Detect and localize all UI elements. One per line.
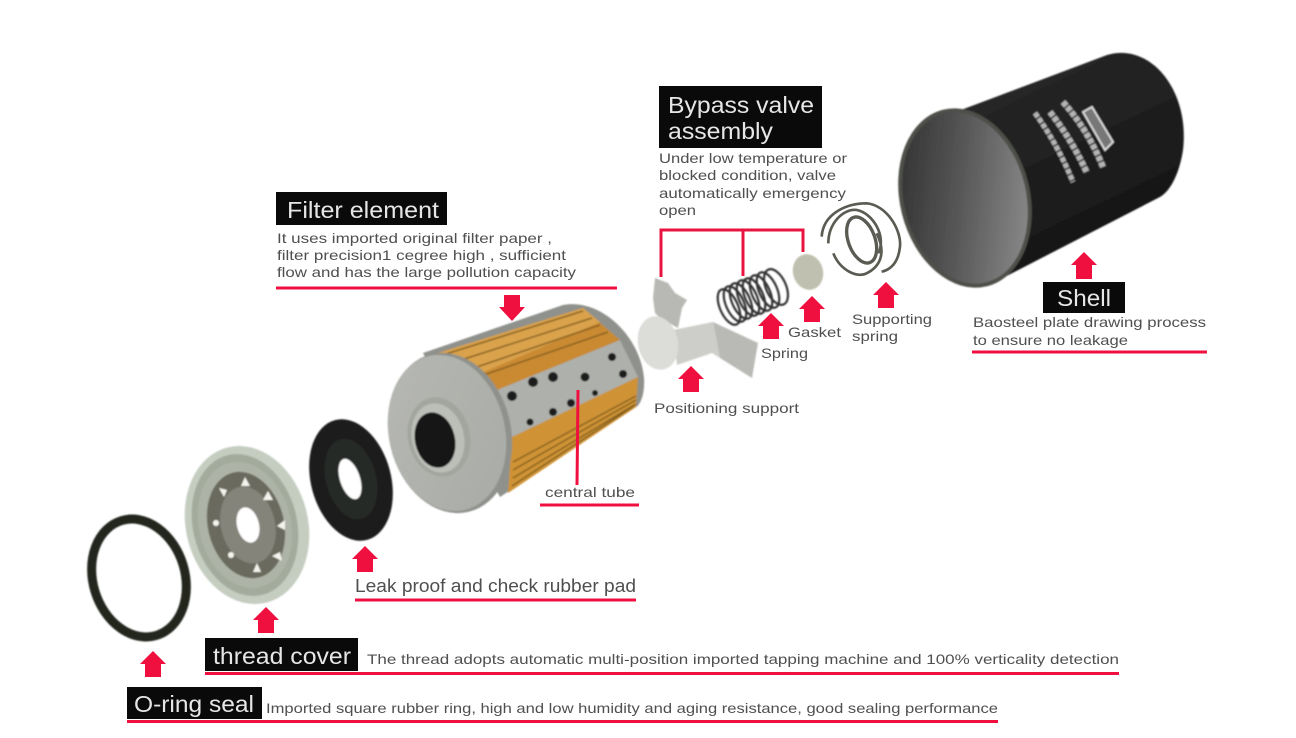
text: central tube: central tube: [545, 484, 635, 500]
underline: rubber pad: [355, 598, 636, 602]
icon: filter element: [372, 304, 644, 526]
text: bypass valve description: Under low temperature or: [659, 150, 847, 166]
icon: spring: [713, 266, 793, 328]
text: thread cover description: The thread adopts automatic multi-position imported tapping machine and 100% verticality detection: [367, 651, 1119, 667]
icon: thread cover: [168, 433, 326, 617]
text: shell description: to ensure no leakage: [973, 332, 1128, 348]
arrow: supporting spring: [873, 282, 899, 308]
label: thread cover: [205, 638, 358, 671]
text: bypass valve description: blocked condition, valve: [659, 167, 836, 183]
label: thread cover: thread cover: [213, 643, 351, 669]
label: O-ring seal: [127, 687, 262, 719]
icon: shell: [880, 53, 1184, 302]
icon: gasket: [789, 251, 827, 293]
text: shell description: [973, 314, 1206, 348]
label: bypass valve assembly: Bypass valve: [668, 92, 814, 118]
text: bypass valve description: automatically emergency: [659, 185, 846, 201]
text: filter element description: [277, 230, 576, 280]
arrow: thread cover: [253, 607, 279, 633]
label: filter element: Filter element: [287, 197, 440, 223]
label: bypass valve assembly: [659, 86, 822, 148]
text: bypass valve description: open: [659, 202, 696, 218]
arrow: filter element: [499, 295, 525, 321]
text: supporting spring: Supporting: [852, 311, 932, 327]
arrow: gasket: [799, 296, 825, 322]
text: gasket: Gasket: [788, 324, 841, 340]
text: supporting spring: spring: [852, 328, 898, 344]
text: spring: Spring: [761, 345, 808, 361]
central tube pointer: [577, 390, 578, 485]
underline: central tube: [540, 504, 639, 506]
arrow: shell: [1071, 252, 1097, 279]
arrow: spring: [758, 313, 784, 339]
label: O-ring seal: O-ring seal: [134, 691, 254, 717]
underline: shell: [972, 350, 1207, 354]
text: shell description: Baosteel plate drawing process: [973, 314, 1206, 330]
label: shell: Shell: [1057, 285, 1111, 311]
label: shell: [1043, 282, 1125, 313]
text: bypass valve description: [659, 150, 847, 218]
text: supporting spring: [852, 311, 932, 344]
icon: O-ring seal: [77, 507, 201, 649]
arrow: rubber pad: [352, 546, 378, 572]
bypass valve bracket: [661, 230, 803, 277]
text: filter element description: flow and has the large pollution capacity: [277, 264, 576, 280]
text: O-ring description: Imported square rubber ring, high and low humidity and aging resistance, good sealing performance: [266, 700, 998, 716]
text: positioning support: Positioning support: [654, 400, 799, 416]
arrow: positioning support: [678, 366, 704, 392]
arrow: O-ring: [140, 651, 166, 677]
label: bypass valve assembly: assembly: [668, 118, 774, 144]
icon: rubber pad: [296, 410, 406, 550]
underline: filter element: [276, 286, 617, 290]
text: leak proof and check rubber pad: Leak proof and check rubber pad: [355, 576, 636, 596]
underline: O-ring: [127, 720, 998, 723]
text: filter element description: It uses imported original filter paper ,: [277, 230, 552, 246]
icon: positioning support: [633, 278, 758, 378]
icon: supporting spring: [822, 203, 900, 275]
text: filter element description: filter precision1 cegree high , sufficient: [277, 247, 566, 263]
label: filter element: [276, 192, 447, 225]
underline: thread cover: [205, 672, 1119, 675]
